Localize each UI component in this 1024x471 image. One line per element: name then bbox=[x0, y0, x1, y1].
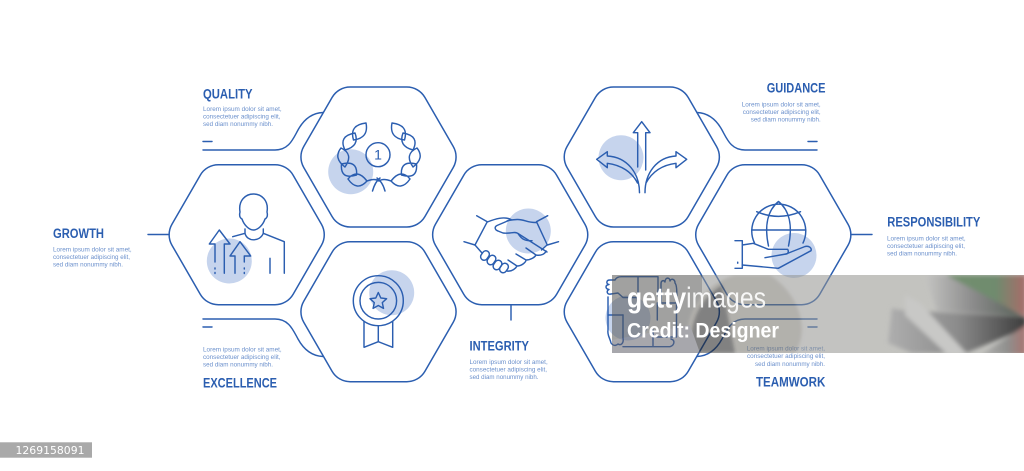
heading: quality: QUALITY bbox=[203, 86, 252, 101]
credit line: Credit: Designer bbox=[627, 319, 779, 342]
heading: excellence: EXCELLENCE bbox=[203, 375, 277, 390]
icon: laurel wreath with number one: 1 bbox=[374, 146, 382, 162]
panel: growth bbox=[53, 165, 324, 305]
text: guidance description: sed diam nonummy nibh. bbox=[751, 116, 821, 123]
heading: growth: GROWTH bbox=[53, 226, 104, 241]
icon: laurel wreath with number one bbox=[328, 123, 420, 194]
panel: integrity bbox=[433, 165, 588, 381]
text: integrity description: consectetuer adipiscing elit, bbox=[470, 367, 547, 374]
text: guidance description: Lorem ipsum dolor sit amet, bbox=[742, 102, 821, 109]
heading: teamwork: TEAMWORK bbox=[756, 375, 826, 390]
text: growth description bbox=[53, 247, 132, 268]
icon: hand holding globe bbox=[735, 202, 816, 278]
hexagon: teamwork bbox=[564, 242, 719, 382]
text: integrity description: sed diam nonummy nibh. bbox=[470, 374, 539, 381]
icon: medal with star bbox=[353, 270, 414, 347]
heading: integrity: INTEGRITY bbox=[470, 339, 529, 354]
hexagon: growth bbox=[169, 165, 324, 305]
image id tag: 1269158091 bbox=[16, 444, 84, 457]
text: teamwork description: Lorem ipsum dolor sit amet, bbox=[747, 346, 825, 353]
text: guidance description bbox=[742, 102, 821, 123]
panel: guidance bbox=[564, 81, 826, 227]
image id tag bbox=[0, 442, 92, 458]
hexagon: guidance bbox=[564, 87, 719, 227]
hexagon: excellence bbox=[301, 242, 456, 382]
hexagon: responsibility bbox=[696, 165, 851, 305]
connector lines bbox=[148, 112, 872, 356]
text: responsibility description: sed diam nonummy nibh. bbox=[887, 250, 957, 257]
text: excellence description bbox=[203, 347, 282, 368]
panel: responsibility bbox=[696, 165, 980, 305]
text: quality description: consectetuer adipiscing elit, bbox=[203, 113, 281, 120]
text: excellence description: consectetuer adipiscing elit, bbox=[203, 354, 281, 361]
text: growth description: sed diam nonummy nibh. bbox=[53, 261, 123, 268]
panel: excellence bbox=[203, 242, 456, 390]
text: responsibility description: Lorem ipsum dolor sit amet, bbox=[887, 236, 966, 243]
text: teamwork description: sed diam nonummy nibh. bbox=[755, 361, 825, 368]
text: integrity description bbox=[470, 359, 548, 381]
heading: guidance: GUIDANCE bbox=[767, 81, 826, 96]
icon: handshake bbox=[464, 208, 558, 274]
panel: quality bbox=[203, 86, 456, 227]
text: growth description: Lorem ipsum dolor sit amet, bbox=[53, 247, 132, 254]
icon: person with rising arrows bbox=[207, 194, 284, 284]
text: excellence description: Lorem ipsum dolor sit amet, bbox=[203, 347, 282, 354]
text: quality description: sed diam nonummy nibh. bbox=[203, 121, 273, 128]
heading: responsibility: RESPONSIBILITY bbox=[887, 215, 980, 230]
hexagon: integrity bbox=[433, 165, 588, 305]
text: responsibility description: consectetuer adipiscing elit, bbox=[887, 243, 965, 250]
text: teamwork description bbox=[747, 346, 825, 368]
icon: four interlocking hands bbox=[606, 277, 677, 347]
text: guidance description: consectetuer adipiscing elit, bbox=[743, 109, 821, 116]
hexagon: quality bbox=[301, 87, 456, 227]
text: responsibility description bbox=[887, 236, 966, 257]
text: teamwork description: consectetuer adipiscing elit, bbox=[747, 353, 825, 360]
text: growth description: consectetuer adipiscing elit, bbox=[53, 254, 130, 261]
text: excellence description: sed diam nonummy nibh. bbox=[203, 361, 273, 368]
text: quality description bbox=[203, 106, 282, 128]
text: quality description: Lorem ipsum dolor sit amet, bbox=[203, 106, 282, 113]
panel: teamwork bbox=[564, 242, 826, 390]
watermark band bbox=[612, 275, 1024, 355]
icon: three-way direction arrows bbox=[597, 122, 687, 193]
text: integrity description: Lorem ipsum dolor sit amet, bbox=[470, 359, 548, 366]
logo: gettyimages: gettyimages bbox=[627, 283, 766, 315]
